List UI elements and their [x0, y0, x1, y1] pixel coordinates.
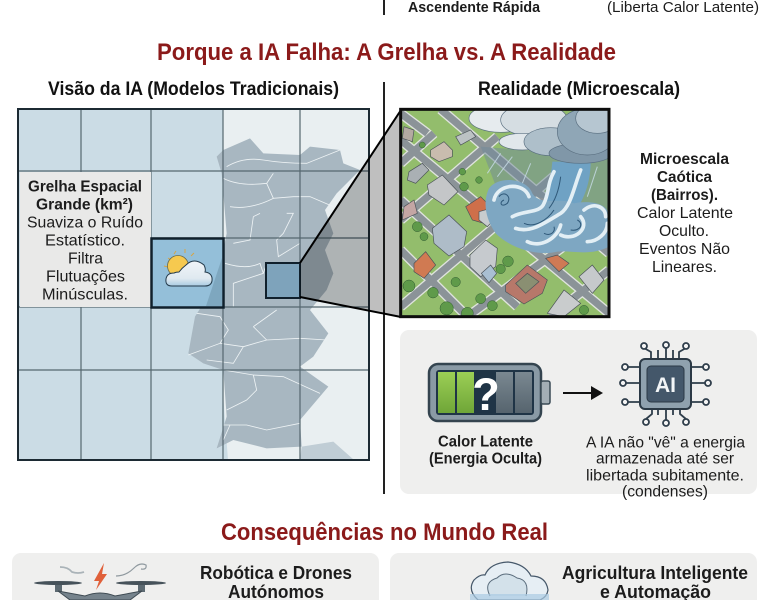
trees — [403, 142, 589, 319]
top row fragment: rapid ascent: Ascendente Rápida — [408, 0, 541, 16]
label: large spatial grid — [20, 172, 151, 307]
icon: AI chip — [620, 342, 711, 426]
rain shaft — [481, 147, 609, 210]
panel: robotics and drones — [12, 553, 379, 600]
buildings — [402, 127, 604, 317]
heading: real-world consequences: Consequências no Mundo Real — [221, 519, 548, 546]
text block: chaotic microscale: Lineares. — [652, 259, 717, 276]
icon: sun behind cloud — [164, 249, 212, 286]
label: large spatial grid: Grande (km²) — [36, 196, 133, 214]
label: latent heat: (Energia Oculta) — [429, 450, 542, 468]
text block: chaotic microscale: Oculto. — [659, 223, 709, 240]
label: latent heat: Calor Latente — [438, 434, 533, 450]
storm swirls — [486, 180, 609, 253]
top row fragment: rapid ascent: (Liberta Calor Latente) — [607, 0, 759, 16]
explanation text: armazenada até ser — [596, 450, 735, 468]
label: large spatial grid: Flutuações — [46, 268, 125, 286]
text block: chaotic microscale: Eventos Não — [639, 241, 730, 258]
highlighted cell with weather icon — [152, 238, 224, 308]
icon: AI chip: AI — [655, 374, 676, 397]
explanation text: A IA não "vê" a energia — [586, 434, 745, 452]
text block: chaotic microscale: (Bairros). — [651, 187, 718, 204]
grelha spatial grid lines — [18, 109, 369, 460]
label: robotics: Robótica e Drones — [200, 562, 352, 583]
icon: cloud — [470, 562, 549, 600]
label: large spatial grid: Minúsculas. — [42, 286, 128, 304]
text block: chaotic microscale: Calor Latente — [637, 205, 733, 222]
label: large spatial grid: Grelha Espacial — [28, 178, 142, 196]
icon: battery with question mark: ? — [472, 369, 500, 420]
label: large spatial grid: Suaviza o Ruído — [27, 214, 143, 232]
panel: chaotic city storm illustration — [401, 103, 619, 319]
streets — [401, 109, 609, 317]
label: agriculture: Agricultura Inteligente — [562, 562, 748, 583]
explanation text: (condenses) — [622, 484, 708, 500]
heading: reality: Realidade (Microescala) — [478, 78, 680, 100]
panel: latent heat — [400, 330, 757, 500]
storm downdraft — [547, 162, 591, 204]
explanation text: libertada subitamente. — [586, 468, 744, 484]
panel: smart agriculture — [390, 553, 757, 600]
icon: battery with question mark — [429, 364, 550, 421]
panel: AI grid map — [18, 109, 369, 460]
text block: chaotic microscale: Microescala — [640, 151, 729, 168]
icon: drone in turbulence — [34, 563, 166, 600]
storm cloud — [468, 110, 608, 164]
top row fragment: rapid ascent — [408, 0, 759, 16]
explanation text — [586, 434, 745, 500]
heading: AI view: Visão da IA (Modelos Tradicionais) — [48, 78, 339, 100]
label: large spatial grid: Estatístico. — [45, 232, 125, 250]
label: robotics — [200, 562, 352, 600]
text block: chaotic microscale: Caótica — [657, 169, 712, 186]
label: agriculture — [562, 562, 748, 600]
text block: chaotic microscale — [637, 151, 733, 276]
map of Portugal — [188, 138, 360, 459]
label: latent heat — [429, 434, 542, 468]
arrow — [563, 386, 603, 400]
zoom wedge arrow — [300, 110, 401, 317]
title: Porque a IA Falha: A Grelha vs. A Realidade — [157, 39, 616, 66]
label: large spatial grid: Filtra — [68, 250, 103, 268]
microscale zoom cell — [266, 263, 300, 298]
